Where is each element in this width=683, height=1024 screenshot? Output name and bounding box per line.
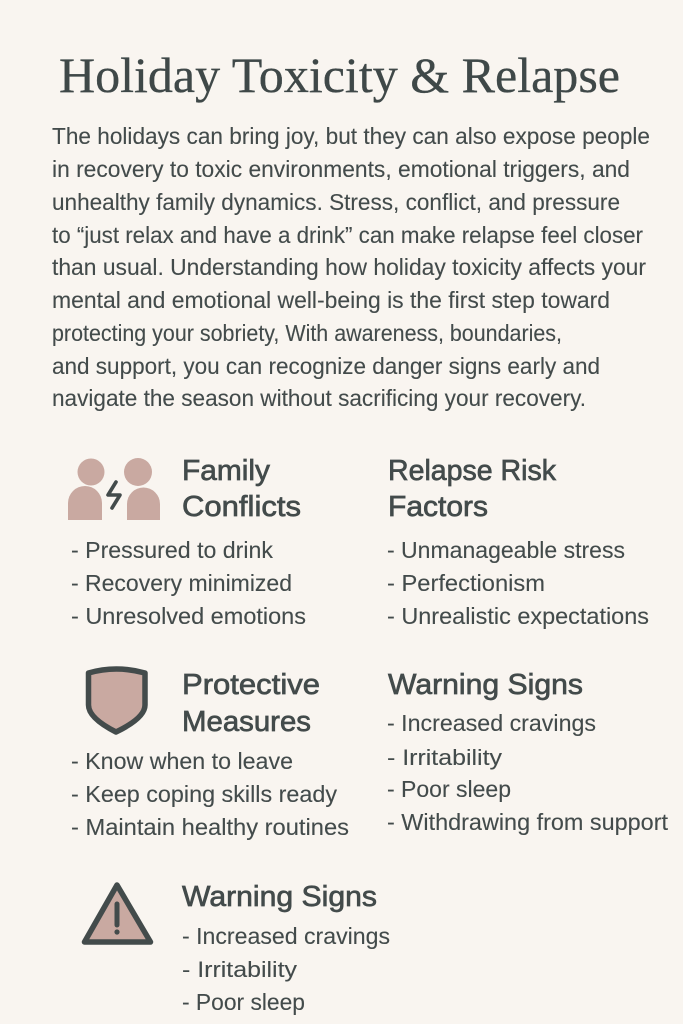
panel: warning signs right: - Increased cravings — [387, 710, 596, 736]
intro paragraph: in recovery to toxic environments, emotional triggers, and — [52, 156, 630, 182]
panel: warning signs bottom: - Increased cravings — [182, 923, 390, 949]
panel: warning signs right: - Withdrawing from support — [387, 809, 669, 835]
panel: relapse risk factors — [387, 455, 649, 629]
icon: shield — [88, 669, 145, 732]
panel: warning signs right — [387, 669, 669, 835]
intro paragraph — [52, 123, 650, 411]
intro paragraph: to “just relax and have a drink” can make relapse feel closer — [52, 222, 643, 248]
panel: protective measures: Measures — [182, 706, 311, 738]
panel: relapse risk factors: - Perfectionism — [387, 570, 545, 596]
panel: relapse risk factors: - Unmanageable stress — [387, 537, 625, 563]
panel: relapse risk factors: - Unrealistic expectations — [387, 603, 649, 629]
panel: warning signs bottom — [182, 881, 390, 1015]
panel: relapse risk factors: Relapse Risk — [388, 455, 556, 487]
intro paragraph: mental and emotional well-being is the first step toward — [52, 287, 610, 313]
panel: warning signs bottom: Warning Signs — [182, 881, 377, 913]
panel: warning signs bottom: - Poor sleep — [182, 989, 305, 1015]
panel: warning signs bottom: - Irritability — [182, 957, 297, 982]
panel: protective measures — [71, 669, 349, 840]
panel: warning signs right: Warning Signs — [388, 669, 583, 701]
icon: warning triangle — [84, 885, 150, 942]
panel: protective measures: Protective — [182, 669, 320, 701]
title: Holiday Toxicity & Relapse — [59, 47, 620, 103]
panel: protective measures: - Keep coping skills ready — [71, 781, 338, 807]
panel: family conflicts: Family — [182, 455, 271, 487]
panel: family conflicts: - Recovery minimized — [71, 570, 292, 596]
panel: family conflicts: - Pressured to drink — [71, 537, 273, 563]
panel: family conflicts — [71, 455, 306, 629]
intro paragraph: than usual. Understanding how holiday toxicity affects your — [52, 254, 646, 280]
panel: warning signs right: - Irritability — [387, 745, 502, 770]
intro paragraph: The holidays can bring joy, but they can also expose people — [52, 123, 650, 149]
panel: protective measures: - Maintain healthy routines — [71, 814, 349, 840]
intro paragraph: protecting your sobriety, With awareness, boundaries, — [52, 320, 562, 346]
panel: family conflicts: - Unresolved emotions — [71, 603, 306, 629]
panel: relapse risk factors: Factors — [388, 491, 488, 523]
icon: family conflict — [68, 458, 160, 520]
intro paragraph: navigate the season without sacrificing your recovery. — [52, 385, 586, 411]
panel: warning signs right: - Poor sleep — [387, 776, 511, 802]
panel: protective measures: - Know when to leave — [71, 748, 293, 774]
panel: family conflicts: Conflicts — [182, 491, 301, 523]
intro paragraph: and support, you can recognize danger signs early and — [52, 353, 600, 379]
intro paragraph: unhealthy family dynamics. Stress, conflict, and pressure — [52, 189, 620, 215]
